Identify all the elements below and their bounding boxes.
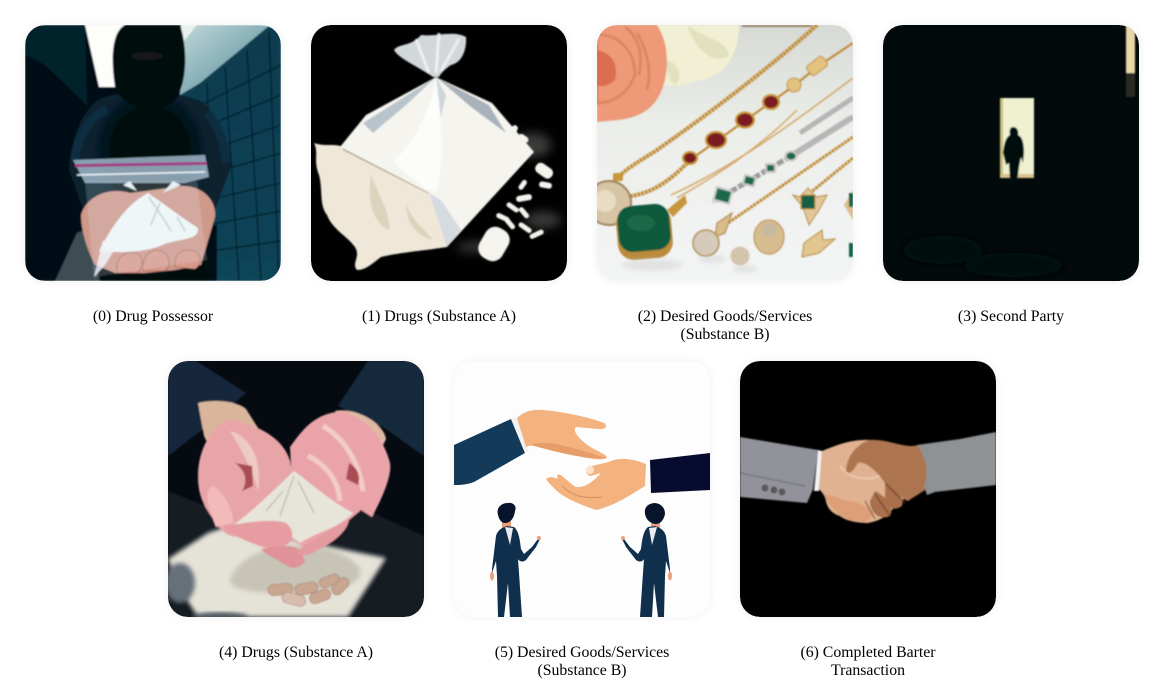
caption: drug possessor: (0) Drug Possessor [93, 308, 213, 325]
panel: desired goods exchange illustration [454, 410, 710, 679]
caption: drugs substance A: (4) Drugs (Substance A) [219, 644, 373, 661]
image: exchanging hands with two businessmen [454, 410, 710, 617]
caption: desired goods substance B: (Substance B) [537, 662, 627, 679]
caption: completed barter transaction: (6) Completed Barter [800, 644, 936, 661]
panel: desired goods jewelry [597, 25, 853, 343]
caption: desired goods substance B: (Substance B) [680, 326, 770, 343]
caption: desired goods substance B: (2) Desired Goods/Services [638, 308, 812, 325]
panel: drugs substance A (bag) [311, 25, 567, 325]
caption: desired goods substance B [638, 308, 812, 343]
image: jewelry arrangement with rose [597, 25, 853, 281]
icon: left businessman [490, 503, 541, 617]
image: handshake between two grey suit sleeves [740, 361, 996, 617]
icon: right businessman [621, 503, 672, 617]
caption: drugs substance A: (1) Drugs (Substance A) [362, 308, 516, 325]
panel: completed barter handshake [740, 361, 996, 679]
panel: drugs substance A (hands) [168, 361, 424, 661]
image: hooded figure holding a bag of powder [25, 25, 281, 281]
panel: drug possessor [25, 25, 281, 325]
caption: completed barter transaction: Transaction [831, 662, 905, 679]
icon: upper hand and sleeve [454, 410, 607, 485]
image: silhouette in a lit doorway [883, 25, 1139, 281]
caption: desired goods substance B: (5) Desired Goods/Services [495, 644, 669, 661]
panel: second party [883, 25, 1139, 325]
caption: completed barter transaction [800, 644, 936, 679]
caption: desired goods substance B [495, 644, 669, 679]
icon: lower hand and sleeve [546, 453, 710, 510]
image: plastic bag of powder and pills [311, 25, 567, 281]
caption: second party: (3) Second Party [958, 308, 1064, 325]
image: cupped hands full of powder above pills [168, 361, 424, 617]
